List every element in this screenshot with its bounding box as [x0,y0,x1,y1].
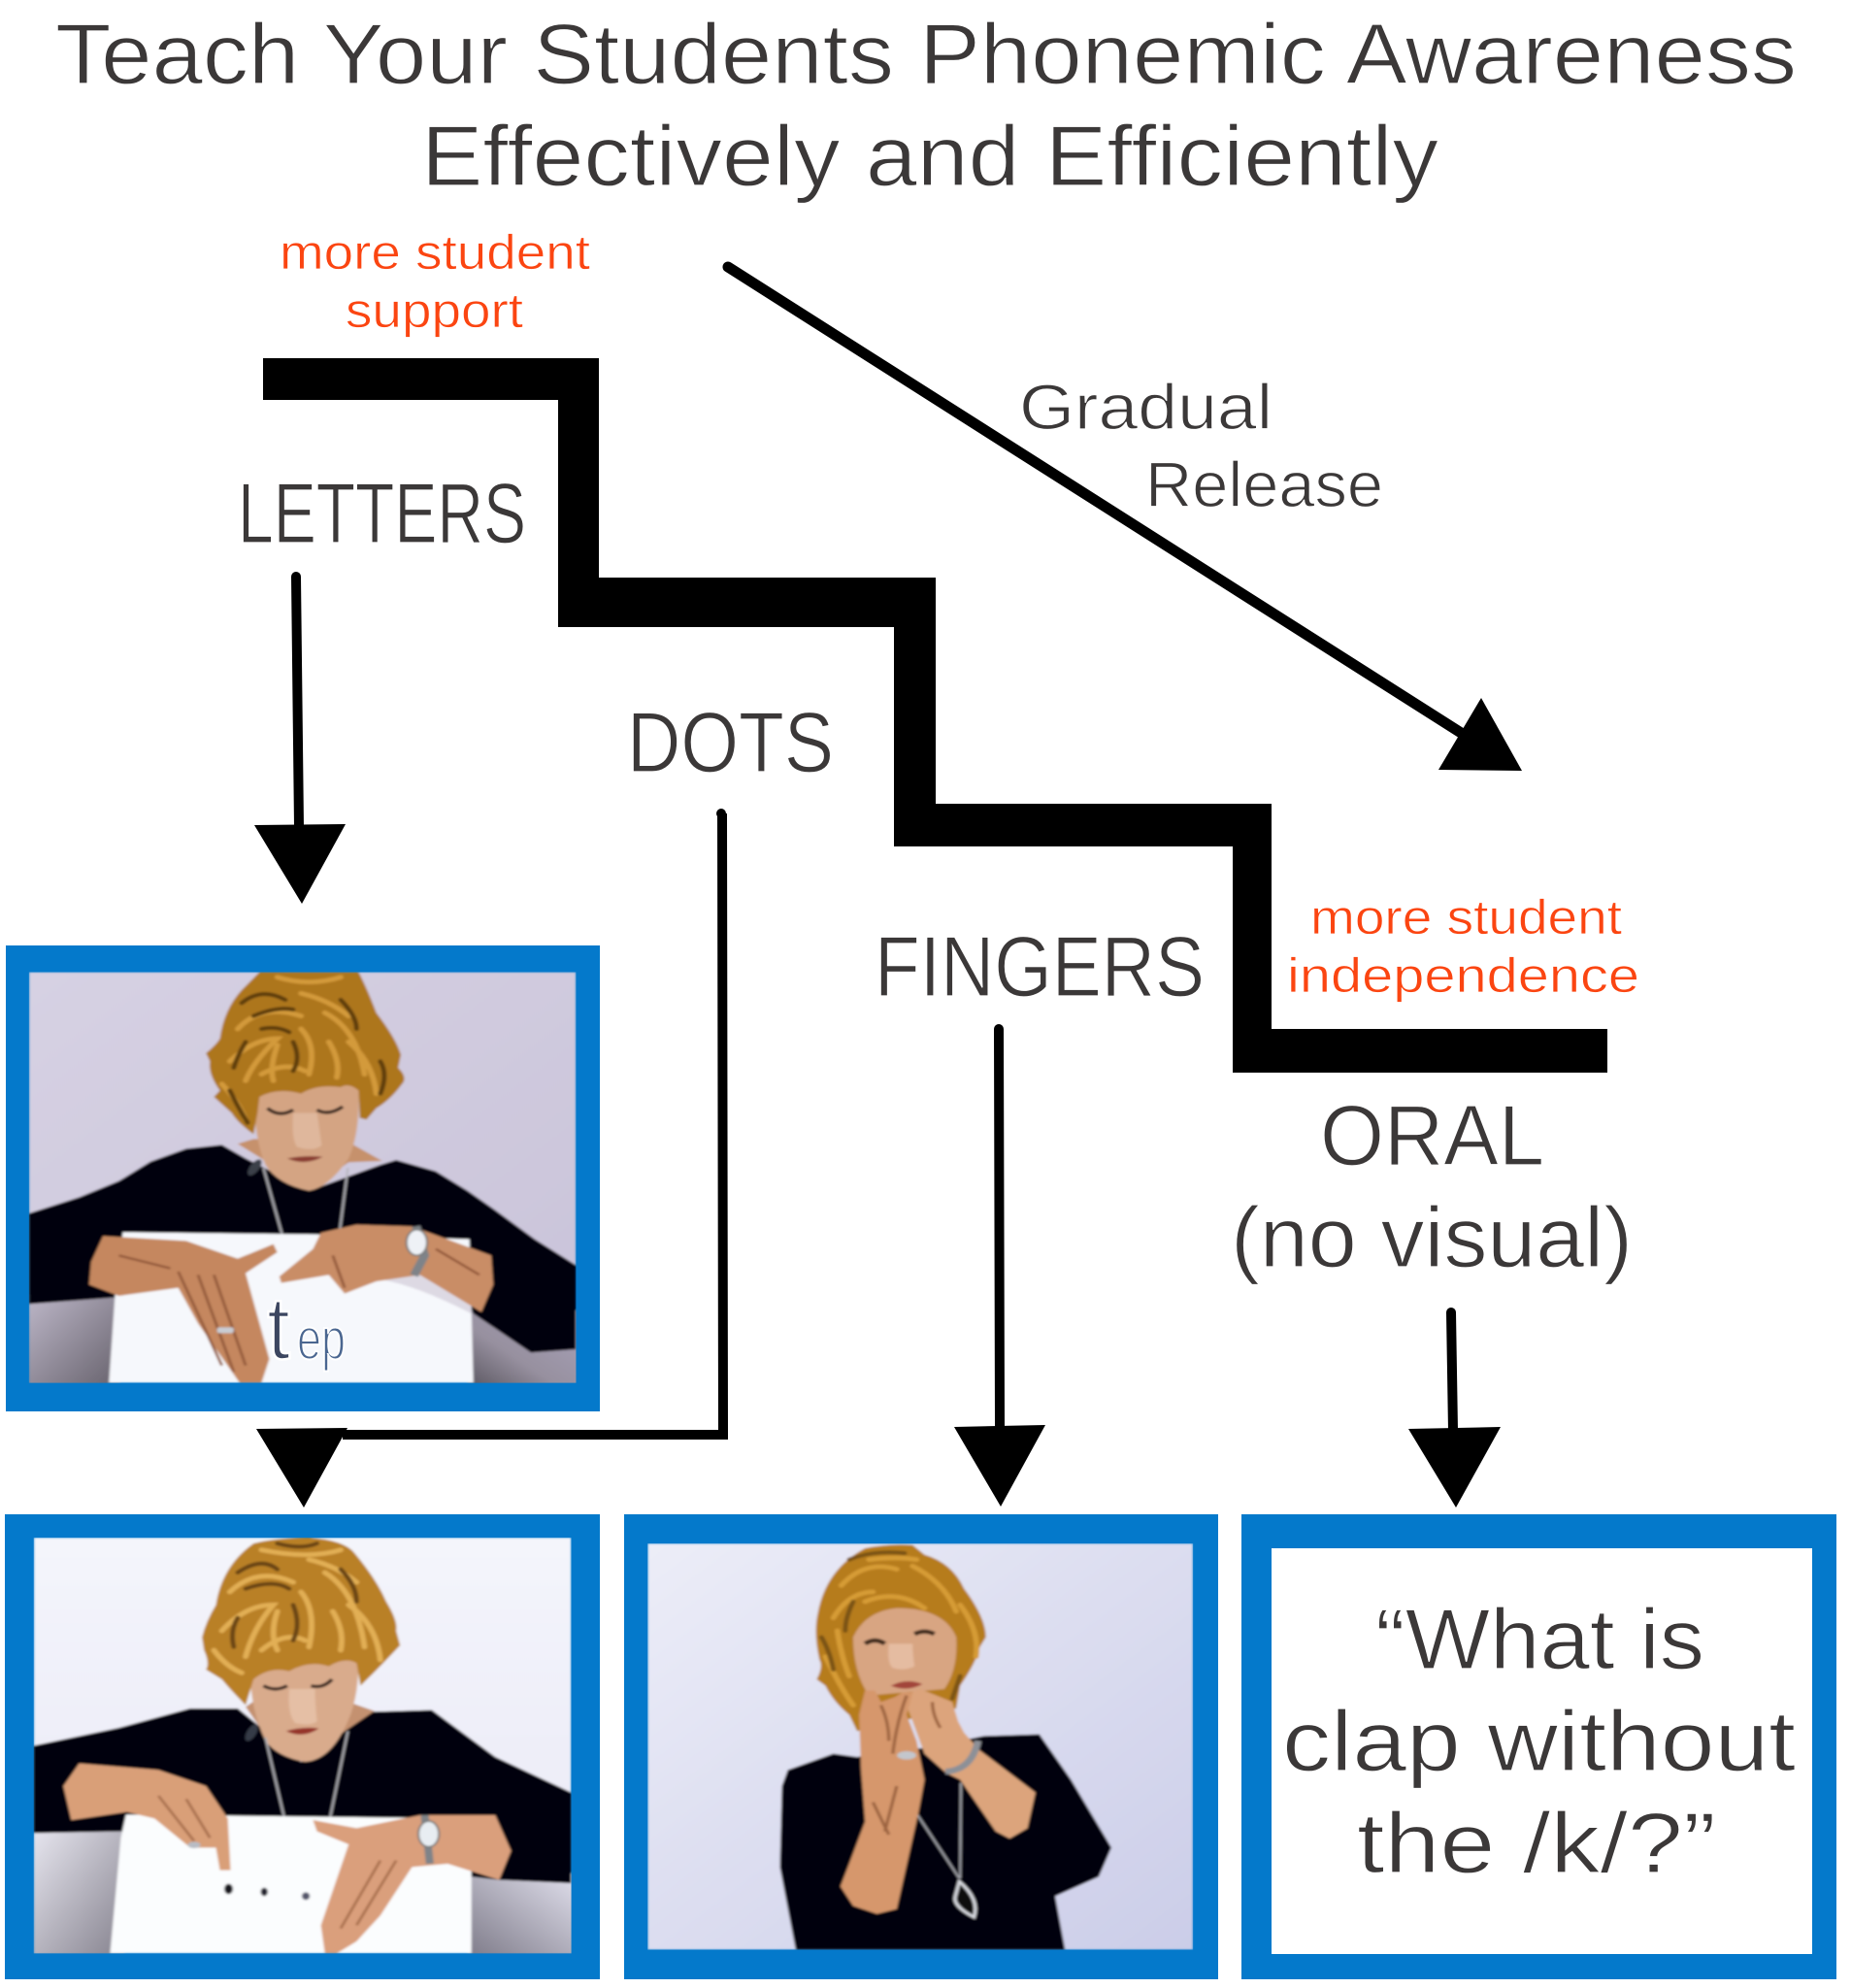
label: oral no visual: (no visual) [1231,1189,1633,1285]
panel: letters photo [6,945,600,1411]
arrow: fingers to photo [954,1029,1045,1507]
quote text: “What is [1375,1591,1704,1687]
panel: fingers photo [624,1514,1218,1979]
label: letters: LETTERS [238,465,526,561]
photo: teacher pointing at dots on board [34,1538,575,1954]
photo: teacher using fingers [647,1543,1193,1950]
panel: dots photo [5,1514,600,1979]
title: Effectively and Efficiently [421,108,1438,204]
quote text: the /k/?” [1357,1795,1716,1891]
arrow: gradual release diagonal [728,267,1522,771]
label: gradual release [1019,371,1383,520]
label: gradual release: Gradual [1019,371,1273,443]
label: oral no visual [1231,1087,1633,1285]
label: more student support: more student [280,225,590,280]
staircase [263,358,1607,1073]
arrow: oral to quote [1408,1312,1501,1508]
label: more student support [280,225,590,338]
label: oral no visual: ORAL [1320,1087,1544,1183]
label: fingers: FINGERS [875,918,1205,1014]
quote text: clap without [1282,1693,1796,1789]
label: gradual release: Release [1145,448,1383,520]
label: more student independence: independence [1287,948,1639,1003]
label: more student independence: more student [1310,890,1622,944]
handwriting: tep on board [268,1300,344,1373]
panel: oral quote [1241,1514,1836,1979]
arrow: letters to photo [254,577,346,904]
label: more student independence [1287,890,1639,1003]
quote text [1282,1591,1796,1891]
title [55,6,1797,204]
label: dots: DOTS [627,694,834,790]
handwriting: tep on board: t [267,1279,290,1378]
photo: teacher pointing at letters on board [29,972,578,1385]
label: more student support: support [346,283,523,338]
title: Teach Your Students Phonemic Awareness [55,6,1797,102]
arrow: dots to photo [256,809,726,1508]
handwriting: tep on board: ep [297,1307,346,1372]
